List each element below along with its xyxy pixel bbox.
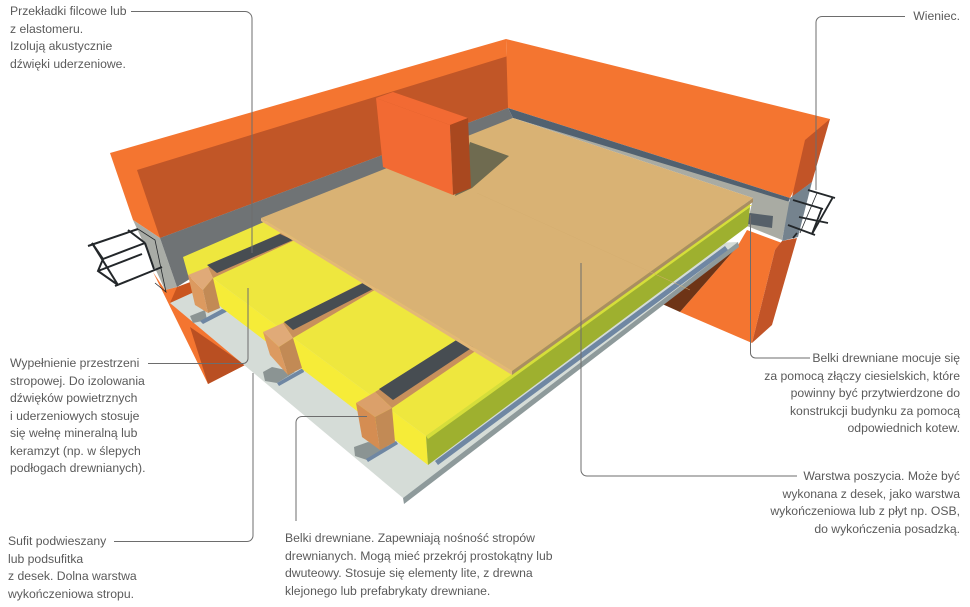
lower right wall — [660, 230, 797, 343]
floor sheathing — [261, 118, 753, 375]
label: beam fastening: konstrukcji budynku za pomocą — [790, 404, 960, 418]
label: suspended ceiling: Sufit podwieszany — [8, 534, 106, 548]
battens under beams — [190, 309, 398, 462]
label: timber beams: dwuteowy. Stosuje się elementy lite, z drewna — [285, 566, 533, 580]
label: sheathing layer: wykonana z desek, jako warstwa — [783, 486, 960, 500]
label: floor space filling: Wypełnienie przestrzeni — [10, 356, 139, 370]
label: felt spacers: dźwięki uderzeniowe. — [10, 56, 126, 70]
label: floor space filling: dźwięków powietrznych — [10, 391, 137, 405]
label: sheathing layer: do wykończenia posadzką. — [814, 522, 960, 536]
timber beam 1 — [188, 232, 295, 313]
label: beam fastening: odpowiednich kotew. — [848, 421, 960, 435]
label: beam fastening: za pomocą złączy ciesielskich, które — [764, 368, 960, 382]
label: felt spacers: z elastomeru. — [10, 22, 83, 36]
label: timber beams: klejonego lub prefabrykaty drewniane. — [285, 584, 490, 598]
label: floor space filling: się wełnę mineralną lub — [10, 426, 137, 440]
timber beam 2 — [263, 280, 378, 375]
label: suspended ceiling: z desek. Dolna warstwa — [8, 569, 137, 583]
label: sheathing layer — [770, 469, 960, 536]
label: floor space filling: keramzyt (np. w ślepych — [10, 444, 141, 458]
label: felt spacers — [10, 4, 127, 70]
label: floor space filling — [10, 356, 146, 475]
ceiling board — [170, 242, 739, 504]
internal wall — [376, 92, 509, 196]
upper wall, right run — [506, 39, 830, 198]
label: suspended ceiling — [8, 534, 137, 600]
upper wall, left run — [110, 39, 508, 238]
label: suspended ceiling: lub podsufitka — [8, 552, 83, 566]
label: sheathing layer: wykończeniowa lub z płyt np. OSB, — [770, 504, 960, 518]
label: floor space filling: i uderzeniowych stosuje — [10, 408, 139, 422]
timber beam 3 — [356, 338, 477, 450]
label: beam fastening: Belki drewniane mocuje się — [812, 351, 960, 365]
label: ring beam: Wieniec. — [913, 9, 960, 23]
label: floor space filling: podłogach drewnianych). — [10, 461, 146, 475]
label: felt spacers: Przekładki filcowe lub — [10, 4, 127, 18]
label: suspended ceiling: wykończeniowa stropu. — [8, 586, 134, 600]
mineral wool — [183, 203, 752, 465]
label: floor space filling: stropowej. Do izolowania — [10, 374, 145, 388]
rebar cage, left — [88, 229, 166, 292]
leader lines — [114, 12, 905, 542]
label: beam fastening — [764, 351, 960, 435]
label: timber beams — [285, 531, 553, 598]
concrete ring beam — [133, 108, 812, 290]
lower left wall — [153, 272, 245, 384]
label: sheathing layer: Warstwa poszycia. Może być — [803, 469, 960, 483]
label: timber beams: Belki drewniane. Zapewniają nośność stropów — [285, 531, 535, 545]
label: timber beams: drewnianych. Mogą mieć przekrój prostokątny lub — [285, 548, 553, 562]
rebar cage, right — [788, 190, 835, 238]
label: felt spacers: Izolują akustycznie — [10, 39, 112, 53]
label: beam fastening: powinny być przytwierdzone do — [791, 386, 960, 400]
